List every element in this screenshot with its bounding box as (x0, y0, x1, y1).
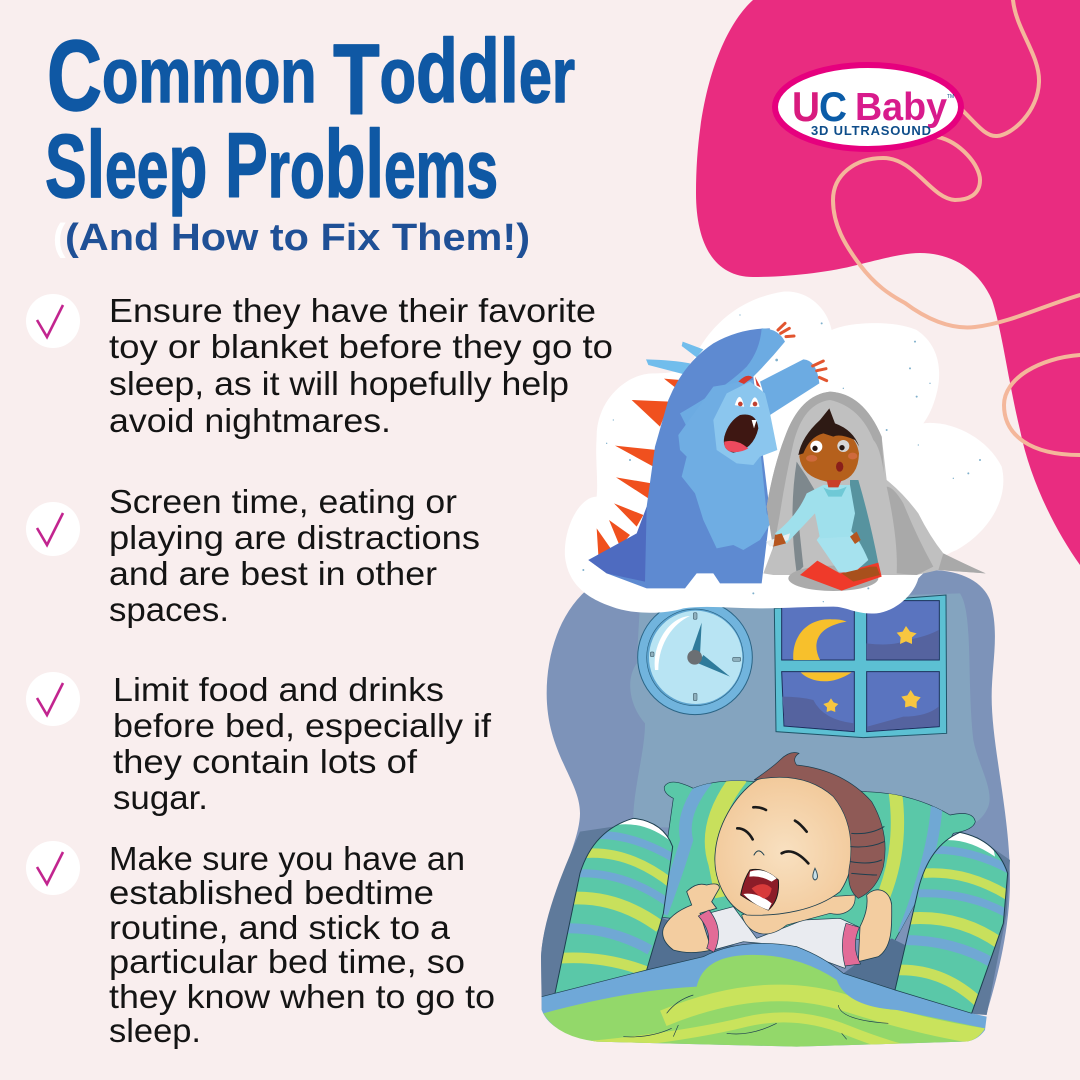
monster eyes (735, 397, 759, 407)
baby mouth (741, 869, 779, 910)
tip 2 text: and are best in other (109, 555, 437, 592)
left bolster pillow (554, 818, 674, 993)
floor shadow left (541, 827, 613, 997)
baby left arm (663, 884, 719, 952)
title: ommon (102, 31, 333, 119)
tip 4 (26, 840, 495, 1049)
wall (541, 570, 1010, 1013)
tip 1 text: toy or blanket before they go to (109, 328, 613, 365)
baby head (715, 774, 854, 915)
title (45, 20, 575, 218)
baby tear (813, 868, 817, 880)
tip 1 text: Ensure they have their favorite (109, 292, 596, 329)
title: ddler (416, 22, 593, 122)
baby hair (754, 752, 885, 898)
tip 4 text: sleep. (109, 1012, 201, 1049)
clock (638, 600, 752, 715)
blanket stripes (590, 984, 985, 1044)
tip 3 text: sugar. (113, 779, 208, 816)
check icon 4 (26, 841, 80, 895)
title: T (333, 24, 380, 136)
monster back fins (646, 342, 703, 375)
tip 4 text (109, 840, 495, 1049)
monster raised arm (680, 328, 785, 427)
clock highlight (655, 616, 690, 670)
cushion (788, 566, 878, 591)
check icon 1 (26, 294, 80, 348)
child torso and arm (775, 485, 855, 543)
cloud speckles (582, 314, 981, 602)
monster brow and claws (738, 376, 761, 387)
tip 3 text (113, 671, 492, 816)
window (774, 595, 947, 738)
tip 3 (26, 671, 492, 816)
child face (810, 441, 822, 453)
right bolster pillow (894, 832, 1008, 1014)
monster body (588, 328, 770, 588)
child under blanket (763, 392, 986, 591)
tip 4 text: routine, and stick to a (109, 909, 451, 946)
tip 2 text (109, 483, 480, 628)
title: Sleep Problems (45, 111, 498, 218)
logo (775, 65, 961, 149)
baby eyes and brows (737, 807, 808, 863)
tip 1 text: sleep, as it will hopefully help (109, 365, 569, 402)
logo tagline: 3D ULTRASOUND (811, 123, 931, 138)
logo word Baby: Baby (855, 86, 947, 129)
monster tail shade (588, 507, 647, 582)
child hands (766, 533, 790, 547)
logo trademark: TM (947, 94, 954, 100)
clock ticks (650, 613, 741, 701)
wall light area (630, 593, 990, 833)
logo mark UC (792, 83, 847, 130)
title: o (380, 31, 416, 119)
tip 2 (26, 483, 480, 628)
subtitle: (And How to Fix Them!) (65, 217, 530, 259)
baby sleeves (698, 910, 861, 966)
stars (823, 626, 921, 712)
baby (663, 752, 892, 968)
blanket (542, 943, 997, 1055)
back pillow (647, 777, 975, 990)
monster spikes (597, 379, 680, 555)
tip 2 text: Screen time, eating or (109, 483, 457, 520)
tip 3 text: Limit food and drinks (113, 671, 444, 708)
tip 1 (26, 292, 613, 439)
tip 4 text: they know when to go to (109, 978, 495, 1015)
tent interior (792, 462, 817, 573)
monster far arm (760, 359, 819, 415)
tip 3 text: they contain lots of (113, 743, 418, 780)
monster (588, 323, 827, 588)
illustration: crying baby in bedroom (541, 570, 1013, 1055)
clock hands (692, 623, 730, 677)
tip 4 text: established bedtime (109, 874, 434, 911)
cloud (565, 292, 1003, 614)
decorative peach lines (833, 0, 1080, 455)
pink blob (696, 0, 1080, 565)
baby nose (754, 851, 764, 855)
baby hair lines (851, 827, 884, 875)
logo mark UC: C (819, 83, 847, 130)
subtitle: ( (53, 217, 66, 259)
check icon 3 (26, 672, 80, 726)
baby shirt (708, 907, 858, 968)
child hair (798, 408, 859, 455)
tip 2 text: spaces. (109, 591, 229, 628)
baby right arm (858, 890, 892, 962)
tip 1 text: avoid nightmares. (109, 402, 391, 439)
child head (799, 428, 859, 482)
night sky shade (782, 630, 939, 731)
tip 2 text: playing are distractions (109, 519, 480, 556)
floor shadow right (963, 837, 1010, 1015)
logo mark UC: U (792, 83, 820, 130)
check icon 2 (26, 502, 80, 556)
thought cloud with monster and child (565, 292, 1003, 614)
blanket folds (767, 392, 986, 575)
tip 1 text (109, 292, 613, 439)
moon (793, 619, 847, 660)
baby neck and chin (742, 895, 855, 934)
tip 3 text: before bed, especially if (113, 707, 492, 744)
tip 4 text: Make sure you have an (109, 840, 465, 877)
title: C (47, 20, 102, 132)
monster head (713, 382, 777, 465)
monster belly (678, 380, 772, 550)
child legs (817, 527, 868, 573)
grey blanket (763, 392, 986, 575)
tip 4 text: particular bed time, so (109, 943, 465, 980)
bed shadow (647, 917, 905, 990)
monster mouth (724, 414, 758, 453)
window panes (782, 601, 939, 732)
